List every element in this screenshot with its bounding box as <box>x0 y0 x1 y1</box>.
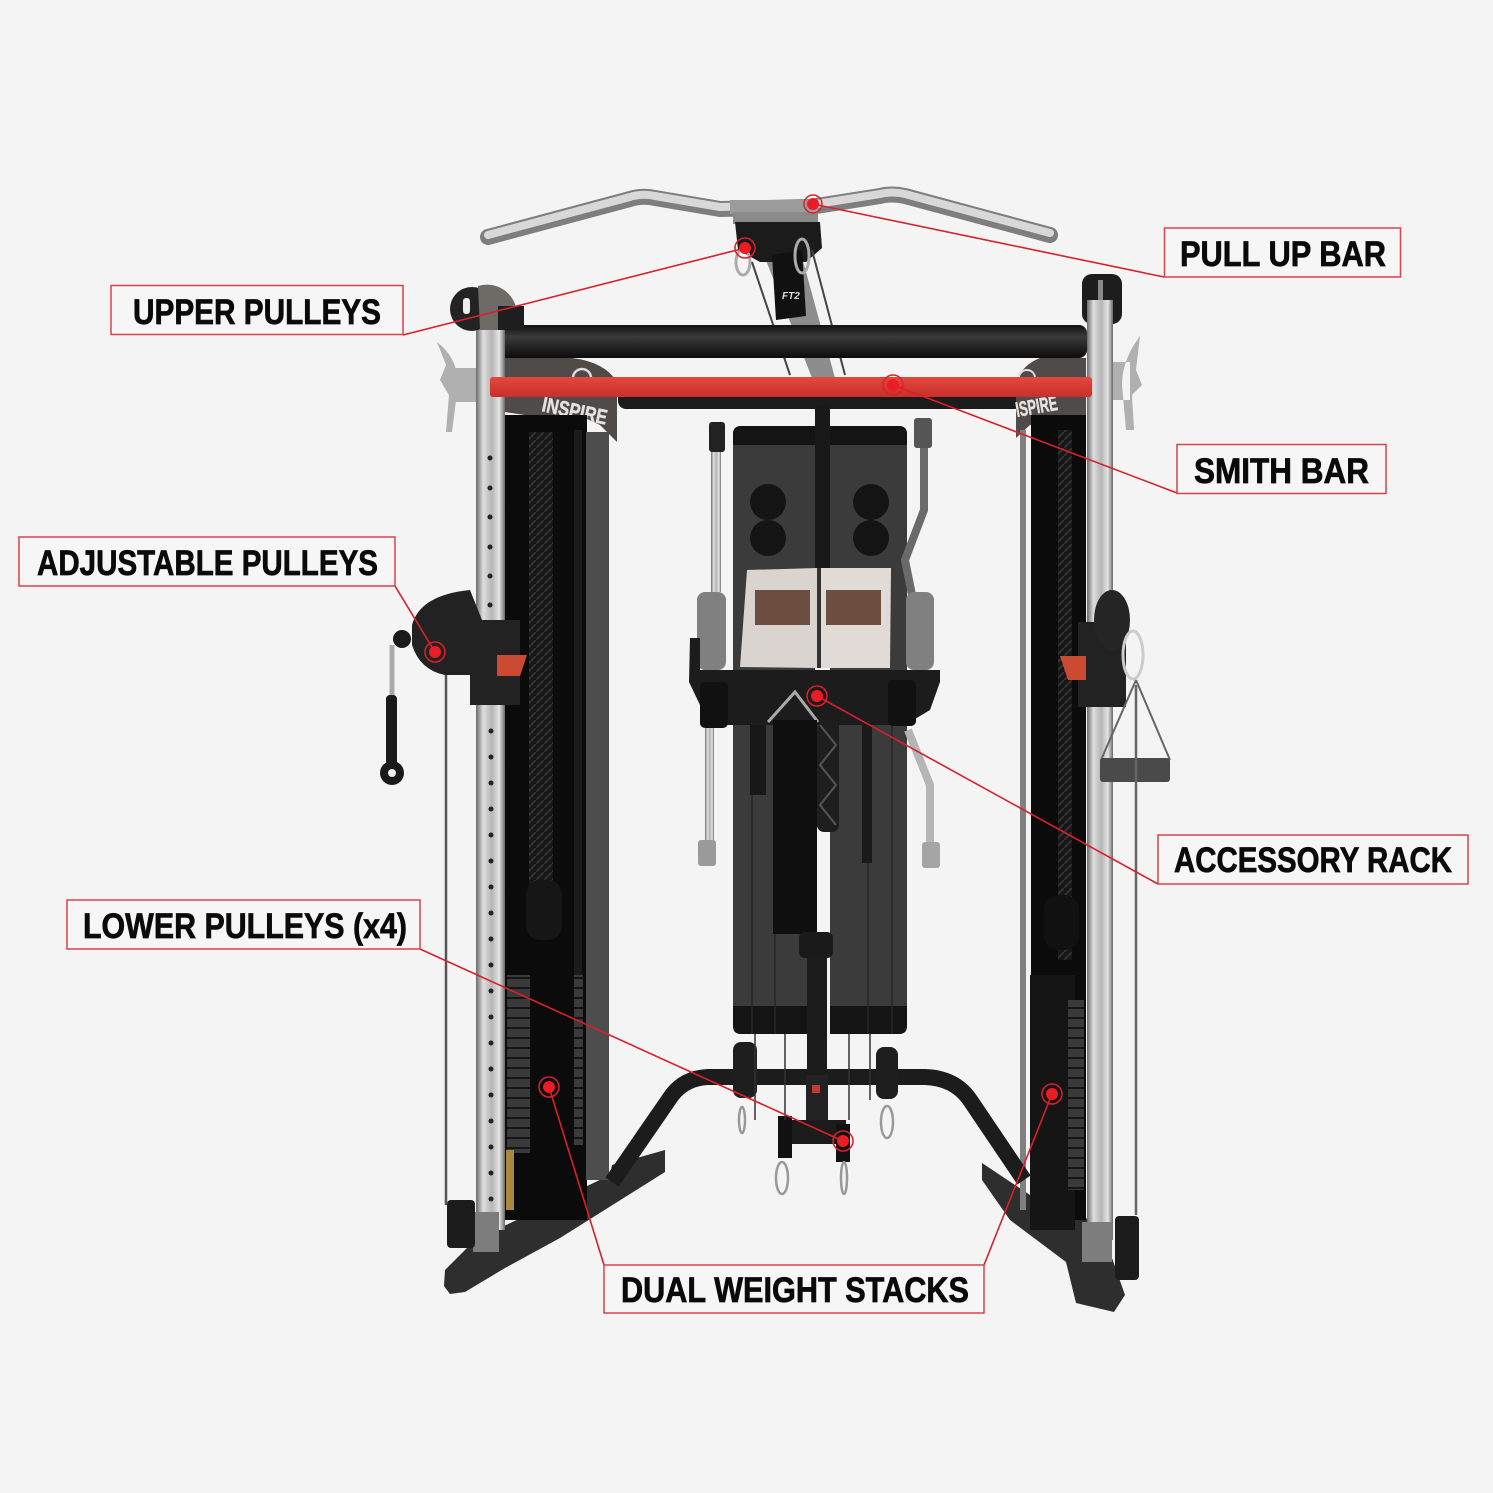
top cross tube <box>497 325 1087 358</box>
marker: right weight stack <box>1042 1084 1062 1104</box>
lower header bar <box>618 390 1023 409</box>
marker: accessory rack <box>807 686 827 706</box>
right adjustable pulley with handle <box>1060 590 1170 1215</box>
upper centre pulley bracket: FT2 <box>782 291 800 302</box>
left adjustable pulley <box>380 590 527 1205</box>
label: lower pulleys x4: LOWER PULLEYS (x4) <box>83 907 407 946</box>
leader line: accessory rack <box>817 696 1158 884</box>
label: pull up bar: PULL UP BAR <box>1180 235 1386 274</box>
lower centre pulleys and carabiners <box>733 1034 898 1194</box>
marker: pull up bar <box>804 195 822 213</box>
marker: lower pulleys <box>833 1131 853 1151</box>
left cowl <box>505 358 617 442</box>
right weight stack tower <box>1020 415 1086 1230</box>
red smith bar <box>490 377 1092 397</box>
left rear foot pulley <box>447 1200 475 1248</box>
central accessory panels <box>733 405 907 1034</box>
exercise book <box>740 568 891 668</box>
leader line: upper pulleys <box>403 248 745 335</box>
machine: functional trainer <box>380 192 1170 1312</box>
right base foot <box>982 1163 1125 1312</box>
right curl bar attachment <box>905 418 940 868</box>
label: adjustable pulleys <box>19 537 395 586</box>
leader line: adjustable pulleys <box>395 586 435 652</box>
right cowl: ISPIRE <box>1014 392 1059 422</box>
label: upper pulleys <box>111 286 403 334</box>
left upper pulley <box>450 285 524 331</box>
pull up bar <box>488 192 1050 237</box>
marker: left weight stack <box>539 1077 559 1097</box>
left chrome column with holes <box>473 330 505 1252</box>
accessory rack <box>689 638 940 1078</box>
right upper pulley <box>1082 274 1122 324</box>
left bar attachment <box>697 422 726 866</box>
left base foot <box>444 1150 665 1294</box>
left weight stack tower <box>505 415 609 1220</box>
upper centre pulley bracket <box>735 222 845 378</box>
label: dual weight stacks: DUAL WEIGHT STACKS <box>621 1271 969 1310</box>
right rear foot pulley <box>1115 1216 1139 1280</box>
leader line: lower pulleys <box>420 949 843 1141</box>
marker: upper pulleys <box>735 238 755 258</box>
marker: adjustable pulleys <box>425 642 445 662</box>
right chrome column <box>1082 300 1113 1262</box>
label: upper pulleys: UPPER PULLEYS <box>133 293 381 332</box>
left bar hook <box>437 342 476 432</box>
arched lower crossbar <box>612 1077 1024 1182</box>
right cowl <box>1014 358 1086 438</box>
leader line: pull up bar <box>813 204 1164 277</box>
label: adjustable pulleys: ADJUSTABLE PULLEYS <box>37 544 378 583</box>
right bar hook <box>1113 336 1142 430</box>
left cowl: INSPIRE <box>540 393 609 430</box>
label: smith bar: SMITH BAR <box>1194 452 1369 491</box>
leader lines: dual weight stacks <box>549 1087 1052 1265</box>
leader line: smith bar <box>893 385 1177 493</box>
marker: smith bar <box>883 375 903 395</box>
